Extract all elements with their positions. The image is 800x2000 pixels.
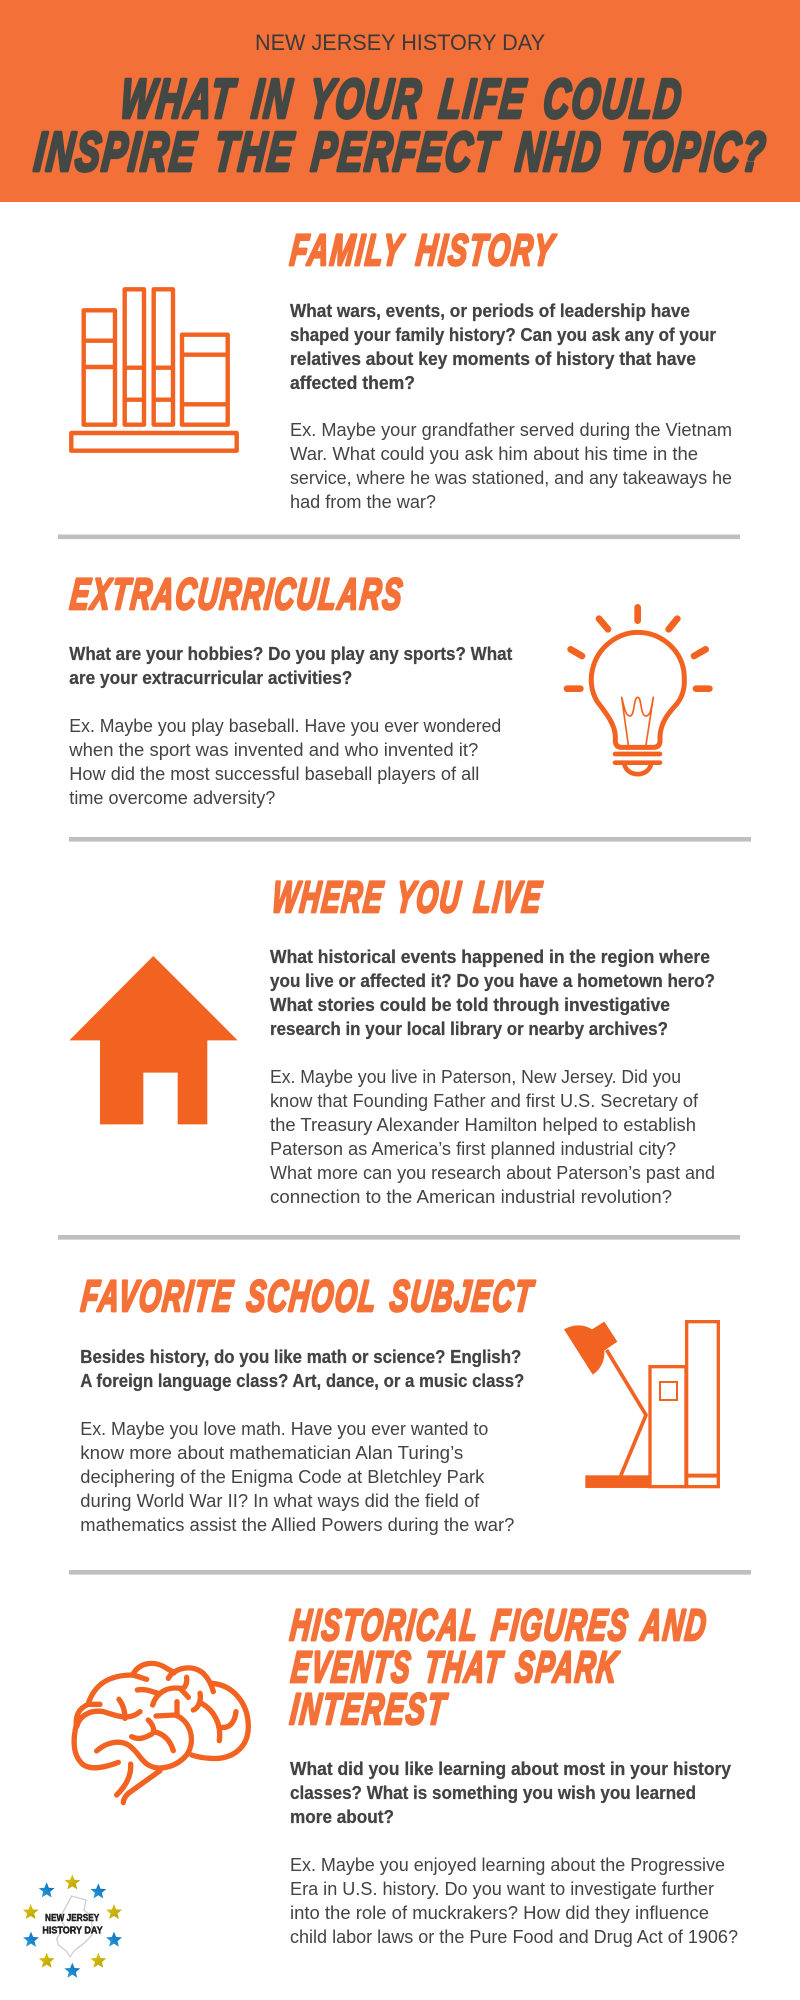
heading: where you live: WHERE YOU LIVE <box>270 873 545 922</box>
example text <box>270 1067 715 1207</box>
example text: How did the most successful baseball players of all <box>69 764 479 784</box>
heading: historical figures and events <box>288 1601 710 1734</box>
panel: extracurriculars <box>68 570 709 808</box>
icon: light bulb <box>567 607 709 774</box>
example text: when the sport was invented and who invented it? <box>68 740 478 760</box>
example text: the Treasury Alexander Hamilton helped to establish <box>270 1115 696 1135</box>
header banner <box>0 0 800 202</box>
question text: you live or affected it? Do you have a hometown hero? <box>270 971 715 991</box>
question text: shaped your family history? Can you ask any of your <box>290 325 716 345</box>
question text: relatives about key moments of history that have <box>290 349 696 369</box>
example text: know more about mathematician Alan Turing’s <box>80 1443 463 1463</box>
question text: What historical events happened in the region where <box>270 947 710 967</box>
question text: What stories could be told through investigative <box>270 995 670 1015</box>
heading: historical figures and events: INTEREST <box>288 1685 450 1734</box>
example text <box>80 1419 514 1535</box>
example text: Era in U.S. history. Do you want to investigate further <box>290 1879 714 1899</box>
example text <box>68 716 501 808</box>
panel: family history <box>71 226 732 512</box>
panel: historical figures and events <box>74 1601 738 1947</box>
example text: What more can you research about Paterson’s past and <box>270 1163 715 1183</box>
example text: Paterson as America’s first planned industrial city? <box>270 1139 676 1159</box>
example text: time overcome adversity? <box>69 788 275 808</box>
example text: Ex. Maybe you enjoyed learning about the Progressive <box>290 1855 725 1875</box>
example text: deciphering of the Enigma Code at Bletchley Park <box>80 1467 485 1487</box>
example text <box>290 1855 738 1947</box>
example text: Ex. Maybe you love math. Have you ever wanted to <box>80 1419 488 1439</box>
panel: where you live <box>69 873 715 1207</box>
icon: brain <box>74 1663 248 1803</box>
question text: affected them? <box>290 373 415 393</box>
heading: historical figures and events: EVENTS THAT SPARK <box>289 1643 621 1692</box>
subtitle: NEW JERSEY HISTORY DAY <box>255 30 545 55</box>
example text: know that Founding Father and first U.S. Secretary of <box>270 1091 699 1111</box>
question text: What wars, events, or periods of leadership have <box>290 301 690 321</box>
example text: mathematics assist the Allied Powers during the war? <box>80 1515 514 1535</box>
example text: had from the war? <box>290 492 436 512</box>
example text: child labor laws or the Pure Food and Drug Act of 1906? <box>290 1927 738 1947</box>
question text: are your extracurricular activities? <box>69 668 352 688</box>
question text: classes? What is something you wish you learned <box>290 1783 696 1803</box>
question text <box>69 644 512 688</box>
question text: more about? <box>290 1807 394 1827</box>
icon: desk lamp and books <box>564 1322 718 1488</box>
question text: What are your hobbies? Do you play any sports? What <box>69 644 512 664</box>
example text <box>290 420 732 512</box>
example text: Ex. Maybe your grandfather served during the Vietnam <box>290 420 732 440</box>
example text: connection to the American industrial revolution? <box>270 1187 672 1207</box>
logo: New Jersey History Day: NEW JERSEY <box>45 1913 100 1924</box>
question text: Besides history, do you like math or science? English? <box>80 1347 521 1367</box>
question text <box>80 1347 524 1391</box>
heading: family history: FAMILY HISTORY <box>288 226 558 275</box>
logo: New Jersey History Day <box>23 1874 122 1978</box>
question text: What did you like learning about most in your history <box>290 1759 731 1779</box>
panel: favorite school subject <box>79 1272 718 1535</box>
question text <box>290 1759 731 1827</box>
question text: A foreign language class? Art, dance, or a music class? <box>80 1371 524 1391</box>
example text: service, where he was stationed, and any takeaways he <box>290 468 732 488</box>
example text: into the role of muckrakers? How did they influence <box>290 1903 709 1923</box>
question text: research in your local library or nearby archives? <box>270 1019 668 1039</box>
title <box>32 68 770 182</box>
heading: extracurriculars: EXTRACURRICULARS <box>68 570 406 619</box>
example text: during World War II? In what ways did the field of <box>80 1491 480 1511</box>
example text: War. What could you ask him about his time in the <box>290 444 698 464</box>
question text <box>270 947 715 1039</box>
icon: house <box>69 956 238 1124</box>
heading: favorite school subject: FAVORITE SCHOOL SUBJECT <box>79 1272 537 1321</box>
example text: Ex. Maybe you play baseball. Have you ever wondered <box>69 716 501 736</box>
logo: New Jersey History Day: HISTORY DAY <box>42 1926 103 1937</box>
example text: Ex. Maybe you live in Paterson, New Jersey. Did you <box>270 1067 681 1087</box>
icon: books on a shelf <box>71 289 237 451</box>
question text <box>290 301 716 393</box>
